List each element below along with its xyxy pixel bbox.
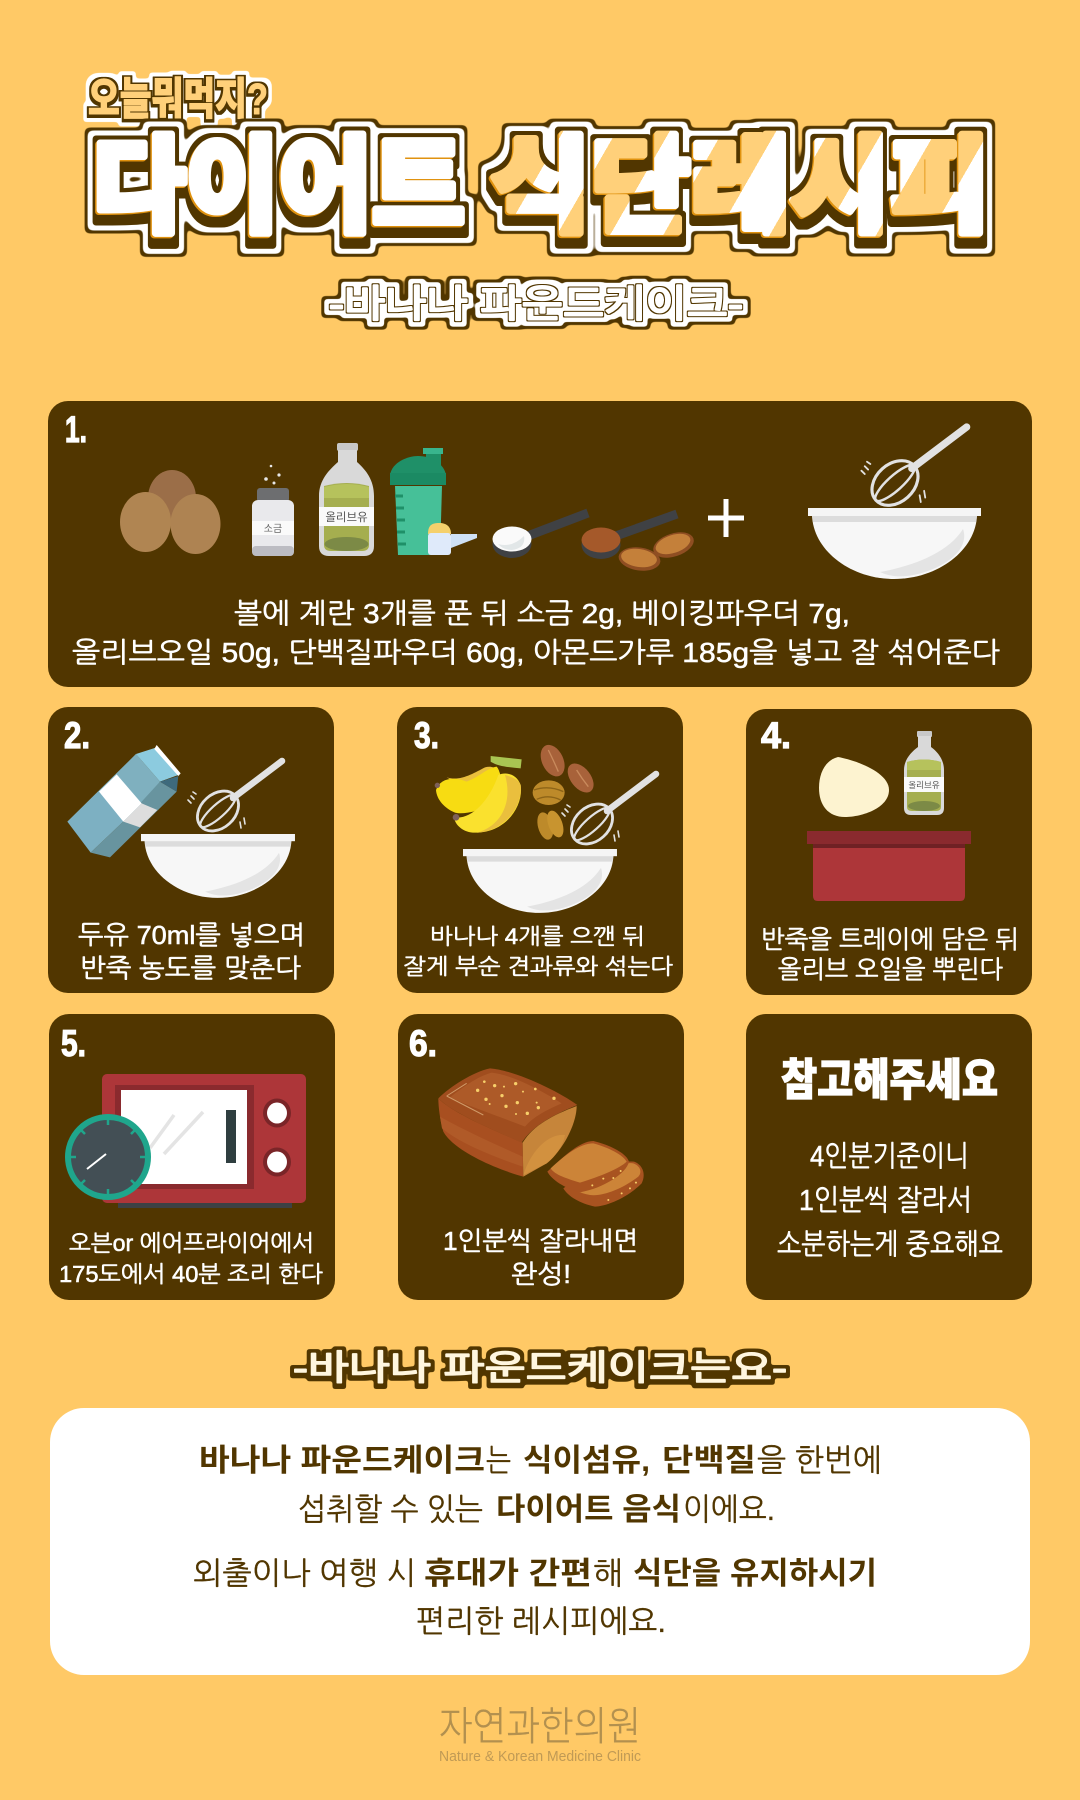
description line 3: 식단을 유지하시기 <box>633 1556 877 1591</box>
icon: olive oil bottle <box>904 731 944 815</box>
icon: baking powder spoon <box>492 513 588 558</box>
icon: bowl <box>463 849 617 913</box>
icon: eggs <box>120 470 220 554</box>
note text: 소분하는게 중요해요 <box>777 1229 1003 1261</box>
icon: protein shaker and scoop <box>390 448 477 555</box>
description line 3: 외출이나 여행 시 <box>193 1556 416 1591</box>
step 6 text: 완성! <box>511 1259 571 1289</box>
panel: step 3 <box>397 707 683 993</box>
icon: salt shaker: 소금 <box>264 523 282 535</box>
note text <box>777 1141 1003 1261</box>
panel: step 6 <box>398 1014 684 1300</box>
title: 다이어트 식단레시피: 식단레시피 <box>491 129 990 246</box>
description line 3: 해 <box>593 1556 623 1591</box>
description line 3 <box>193 1556 877 1591</box>
note text: 1인분씩 잘라서 <box>799 1185 972 1217</box>
description line 1: 는 <box>486 1443 511 1478</box>
icon: almond powder spoon and almonds <box>582 514 697 573</box>
icon: whisk <box>188 761 282 839</box>
icon: bananas <box>435 756 522 833</box>
icon: oven <box>102 1074 306 1208</box>
step 2 text: 반죽 농도를 맞춘다 <box>80 953 301 983</box>
icon: whisk <box>861 427 967 514</box>
step 5 text <box>59 1230 323 1287</box>
note heading: 참고해주세요 <box>781 1056 998 1105</box>
icon: olive oil bottle: 올리브유 <box>908 780 940 790</box>
header tag: 오늘뭐먹지?: 오늘뭐먹지? <box>88 75 268 124</box>
icon: bowl <box>141 834 295 898</box>
step 5 text: 175도에서 40분 조리 한다 <box>59 1261 323 1287</box>
section heading: -바나나 파운드케이크는요- <box>293 1349 787 1388</box>
description line 2 <box>298 1492 775 1527</box>
icon: salt shaker <box>252 465 294 556</box>
icon: baking tray <box>807 831 971 901</box>
description line 1: 바나나 파운드케이크 <box>199 1443 485 1478</box>
step 3 text <box>403 924 673 979</box>
icon: pound cake <box>438 1068 577 1177</box>
icon: batter <box>819 757 889 817</box>
description line 2: 섭취할 수 있는 <box>298 1492 483 1527</box>
step 3 text: 잘게 부순 견과류와 섞는다 <box>403 954 673 979</box>
step 3 text: 바나나 4개를 으깬 뒤 <box>430 924 645 949</box>
panel: note <box>746 1014 1032 1300</box>
logo: 자연과한의원 <box>439 1705 641 1749</box>
step number 2: 2. <box>64 715 90 756</box>
step 2 text <box>78 920 305 983</box>
logo: Nature & Korean Medicine Clinic <box>439 1748 641 1765</box>
subtitle: 바나나 파운드케이크: -바나나 파운드케이크- <box>329 284 743 326</box>
icon: timer clock <box>67 1116 149 1198</box>
panel: step 4 <box>746 709 1032 995</box>
description line 2: 다이어트 음식 <box>496 1492 681 1527</box>
description line 1: 단백질 <box>662 1443 756 1478</box>
panel: description <box>50 1408 1030 1675</box>
description line 4: 편리한 레시피에요. <box>416 1604 666 1639</box>
description line 3: 휴대가 간편 <box>424 1556 592 1591</box>
description line 2: 이에요. <box>683 1492 775 1527</box>
step number 6: 6. <box>409 1023 437 1064</box>
panel: step 5 <box>49 1014 335 1300</box>
step 6 text: 1인분씩 잘라내면 <box>443 1226 638 1256</box>
step 4 text: 올리브 오일을 뿌린다 <box>778 956 1003 984</box>
step 1 text <box>72 598 1001 668</box>
icon: olive oil bottle <box>319 443 374 556</box>
step number 1: 1. <box>65 409 87 450</box>
step 6 text <box>443 1226 638 1289</box>
step 1 text: 볼에 계란 3개를 푼 뒤 소금 2g, 베이킹파우더 7g, <box>234 598 850 629</box>
panel: step 2 <box>48 707 334 993</box>
step number 4: 4. <box>761 715 791 756</box>
icon: milk carton <box>67 745 181 857</box>
step number 3: 3. <box>414 715 439 756</box>
step 2 text: 두유 70ml를 넣으며 <box>78 920 305 950</box>
logo <box>439 1705 641 1765</box>
step 1 text: 올리브오일 50g, 단백질파우더 60g, 아몬드가루 185g을 넣고 잘 섞어준다 <box>72 637 1001 668</box>
step 4 text: 반죽을 트레이에 담은 뒤 <box>761 926 1019 954</box>
icon: nuts <box>533 741 599 841</box>
panel: step 1 <box>48 401 1032 687</box>
step 4 text <box>761 926 1019 984</box>
icon: plus <box>708 499 744 537</box>
icon: whisk <box>562 774 656 852</box>
icon: bread slices <box>547 1141 644 1207</box>
description line 1 <box>199 1443 882 1478</box>
step 5 text: 오븐or 에어프라이어에서 <box>69 1230 314 1256</box>
icon: olive oil bottle: 올리브유 <box>325 511 368 524</box>
description line 1: 식이섬유, <box>523 1443 650 1478</box>
step number 5: 5. <box>61 1023 86 1064</box>
title: 다이어트 식단레시피: 다이어트 <box>93 129 465 246</box>
description line 1: 을 한번에 <box>757 1443 882 1478</box>
note text: 4인분기준이니 <box>810 1141 969 1173</box>
icon: mixing bowl <box>808 508 981 579</box>
title: 다이어트 식단레시피 <box>93 129 990 246</box>
